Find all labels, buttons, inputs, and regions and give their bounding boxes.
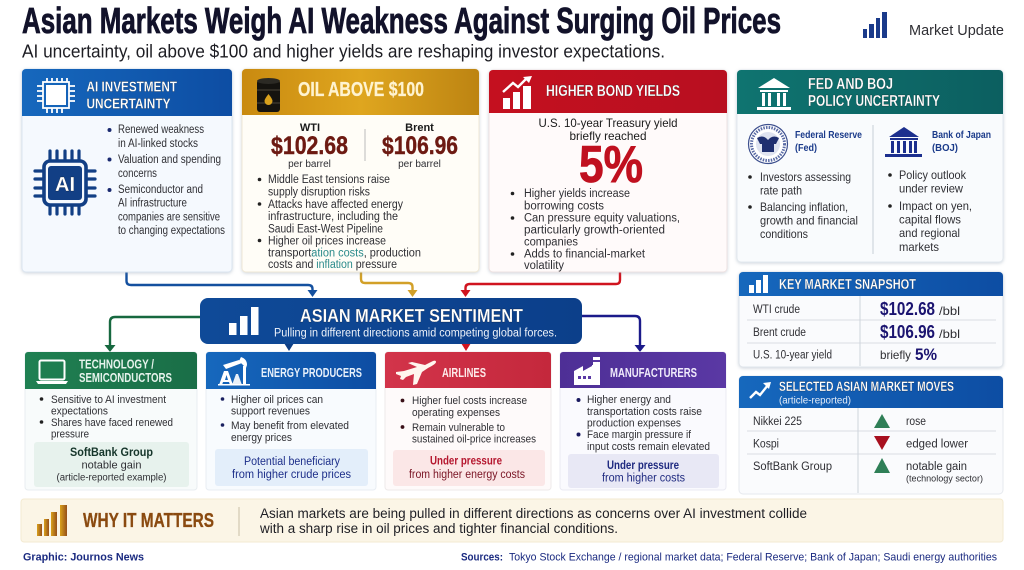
technology bullets: pressure <box>51 428 89 440</box>
energy callout: Potential beneficiary <box>244 456 340 468</box>
manufacturers heading: MANUFACTURERS <box>610 366 697 380</box>
panel: energy producers <box>206 352 376 490</box>
Fed bullets: growth and financial <box>760 214 858 228</box>
treasury yield callout: U.S. 10-year Treasury yield <box>538 116 678 130</box>
panel: Asian market sentiment <box>200 298 582 351</box>
why it matters text: with a sharp rise in oil prices and tighter financial conditions. <box>259 521 618 536</box>
snapshot heading: KEY MARKET SNAPSHOT <box>779 277 916 293</box>
SoftBank callout: notable gain <box>82 460 142 472</box>
AI panel bullets: concerns <box>118 168 157 180</box>
treasury yield callout <box>538 116 678 194</box>
WTI price <box>271 122 348 170</box>
airlines heading: AIRLINES <box>442 366 486 380</box>
energy bullets: support revenues <box>231 406 310 418</box>
SoftBank callout: (article-reported example) <box>56 472 166 484</box>
Fed bullets: rate path <box>760 184 802 198</box>
manufacturers callout <box>568 454 719 488</box>
icon: factory <box>574 357 600 385</box>
AI panel bullets: to changing expectations <box>118 225 225 237</box>
icon: central bank building <box>757 78 791 110</box>
snapshot values: $106.96 <box>880 321 935 342</box>
airlines callout <box>393 450 545 486</box>
icon: trend line <box>750 382 771 398</box>
why it matters text: Asian markets are being pulled in different directions as concerns over AI investment collide <box>260 506 807 521</box>
technology heading: TECHNOLOGY / <box>79 358 154 372</box>
Bank of Japan label <box>932 129 991 154</box>
snapshot values: 5% <box>915 345 937 364</box>
bond panel bullets: Can pressure equity valuations, <box>524 212 680 224</box>
up and down triangles <box>874 414 890 473</box>
WTI price: WTI <box>300 122 320 134</box>
Bank of Japan label: (BOJ) <box>932 142 958 154</box>
icon: snapshot bars <box>749 275 768 293</box>
BOJ bullets: under review <box>899 182 963 196</box>
energy bullets: May benefit from elevated <box>231 420 349 432</box>
panel: why it matters <box>21 499 1003 542</box>
moves heading <box>779 379 954 406</box>
oil panel bullets: Attacks have affected energy <box>268 199 403 211</box>
airlines bullets: Higher fuel costs increase <box>412 395 527 407</box>
icon: market update bars <box>863 12 887 38</box>
footer: sources: Tokyo Stock Exchange / regional market data; Federal Reserve; Bank of Japan; Saudi energy authorities <box>509 552 997 564</box>
manufacturers bullets: input costs remain elevated <box>587 441 710 453</box>
energy callout <box>215 449 368 486</box>
icon: sentiment bars <box>229 307 258 335</box>
airlines callout: from higher energy costs <box>409 469 525 481</box>
manufacturers callout: from higher costs <box>602 472 685 484</box>
AI panel heading: AI INVESTMENT <box>86 78 177 96</box>
sentiment heading: ASIAN MARKET SENTIMENT <box>300 305 524 326</box>
AI panel heading: UNCERTAINTY <box>86 96 170 112</box>
snapshot values: /bbl <box>939 327 960 341</box>
manufacturers bullets: Higher energy and <box>587 394 671 406</box>
bond panel bullets: volatility <box>524 260 564 272</box>
manufacturers bullets <box>576 394 710 453</box>
icon: laptop <box>36 360 68 384</box>
icon: AI chip: AI <box>55 174 75 196</box>
icon: gold bars <box>37 505 67 536</box>
technology bullets: expectations <box>51 406 108 418</box>
AI panel bullets: Valuation and spending <box>118 154 221 166</box>
technology heading: SEMICONDUCTORS <box>79 371 172 385</box>
moves labels: Nikkei 225 <box>753 416 802 428</box>
energy bullets: Higher oil prices can <box>231 394 323 406</box>
oil panel bullets: Saudi East-West Pipeline <box>268 224 383 236</box>
BOJ bullets: markets <box>899 240 939 254</box>
moves labels: SoftBank Group <box>753 461 832 473</box>
oil panel bullets: Higher oil prices increase <box>268 236 386 248</box>
WTI price: per barrel <box>288 159 331 170</box>
moves results: notable gain <box>906 461 967 473</box>
manufacturers bullets: production expenses <box>587 418 681 430</box>
treasury yield callout: briefly reached <box>570 129 646 143</box>
panel: Fed and BOJ policy uncertainty <box>737 70 1003 262</box>
moves labels: Kospi <box>753 438 779 450</box>
Fed bullets <box>748 170 858 241</box>
snapshot labels: Brent crude <box>753 327 806 339</box>
Brent price: per barrel <box>398 159 441 170</box>
icon: Bank of Japan building <box>885 127 922 157</box>
icon: Federal Reserve seal <box>748 124 788 164</box>
AI panel bullets: companies are sensitive <box>118 212 220 224</box>
bond panel bullets: Higher yields increase <box>524 188 630 200</box>
icon: rising bars <box>503 76 532 109</box>
Bank of Japan label: Bank of Japan <box>932 129 991 141</box>
sentiment subtitle: Pulling in different directions amid competing global forces. <box>274 328 557 340</box>
AI panel bullets: Renewed weakness <box>118 124 204 136</box>
oil panel heading: OIL ABOVE $100 <box>298 79 424 101</box>
footer: graphic credit: Graphic: Journos News <box>23 552 144 564</box>
Federal Reserve label: Federal Reserve <box>795 129 862 141</box>
snapshot values <box>880 298 960 364</box>
panel: key market snapshot <box>739 272 1003 367</box>
bond panel bullets: particularly growth-oriented <box>524 224 665 236</box>
AI panel bullets <box>108 124 225 237</box>
moves results: (technology sector) <box>906 474 983 484</box>
energy bullets <box>221 394 349 444</box>
Brent price: $106.96 <box>382 132 458 160</box>
Fed bullets: conditions <box>760 227 808 241</box>
energy bullets: energy prices <box>231 432 292 444</box>
Fed panel heading: POLICY UNCERTAINTY <box>808 93 940 110</box>
SoftBank callout: SoftBank Group <box>70 445 153 459</box>
WTI price: $102.68 <box>271 132 348 160</box>
BOJ bullets: and regional <box>899 226 960 240</box>
oil panel bullets: supply disruption risks <box>268 186 370 198</box>
manufacturers bullets: Face margin pressure if <box>587 429 692 441</box>
Fed panel heading <box>808 76 940 110</box>
panel: selected Asian market moves <box>739 376 1003 494</box>
Federal Reserve label <box>795 129 862 154</box>
market update label: Market Update <box>909 23 1004 39</box>
moves labels <box>753 416 832 473</box>
bond panel bullets <box>511 188 680 272</box>
why it matters heading: WHY IT MATTERS <box>83 510 214 532</box>
icon: oil barrel <box>257 78 280 112</box>
oil panel bullets: transportation costs, production <box>268 248 421 260</box>
panel: oil above $100 <box>242 69 479 272</box>
panel: higher bond yields <box>489 70 727 272</box>
footer: sources: Sources: <box>461 552 503 564</box>
Fed bullets: Investors assessing <box>760 170 851 184</box>
technology bullets <box>40 394 173 440</box>
energy callout: from higher crude prices <box>232 469 351 481</box>
Fed panel heading: FED AND BOJ <box>808 76 893 93</box>
AI panel bullets: Semiconductor and <box>118 184 203 196</box>
BOJ bullets <box>888 168 972 254</box>
Brent price <box>382 122 458 170</box>
airlines bullets: sustained oil-price increases <box>412 434 536 446</box>
snapshot labels <box>753 304 832 362</box>
panel: technology / semiconductors <box>25 352 197 490</box>
bond panel bullets: companies <box>524 236 578 248</box>
oil panel bullets: Middle East tensions raise <box>268 174 390 186</box>
manufacturers bullets: transportation costs raise <box>587 406 702 418</box>
AI panel heading <box>86 78 177 112</box>
Fed bullets: Balancing inflation, <box>760 200 848 214</box>
airlines bullets: Remain vulnerable to <box>412 422 505 434</box>
Brent price: Brent <box>405 122 434 134</box>
icon: AI chip <box>35 151 95 214</box>
connector arrows into sentiment <box>104 272 646 352</box>
panel: AI investment uncertainty <box>22 69 232 272</box>
AI panel bullets: in AI-linked stocks <box>118 138 198 150</box>
airlines callout: Under pressure <box>430 456 502 468</box>
snapshot values: /bbl <box>939 304 960 318</box>
technology bullets: Shares have faced renewed <box>51 417 173 429</box>
moves heading: (article-reported) <box>779 396 851 406</box>
icon: oil pump <box>218 357 250 386</box>
bond panel bullets: Adds to financial-market <box>524 248 646 260</box>
treasury yield callout: 5% <box>579 136 643 194</box>
snapshot labels: WTI crude <box>753 304 800 316</box>
oil panel bullets: infrastructure, including the <box>268 211 398 223</box>
moves results <box>906 416 983 484</box>
technology bullets: Sensitive to AI investment <box>51 394 166 406</box>
panel: manufacturers <box>560 352 726 490</box>
panel: airlines <box>385 352 551 490</box>
moves heading: SELECTED ASIAN MARKET MOVES <box>779 379 954 394</box>
moves results: rose <box>906 416 926 428</box>
manufacturers callout: Under pressure <box>607 460 679 472</box>
snapshot labels: U.S. 10-year yield <box>753 350 832 362</box>
moves results: edged lower <box>906 438 968 450</box>
BOJ bullets: capital flows <box>899 212 961 226</box>
subtitle: AI uncertainty, oil above $100 and higher yields are reshaping investor expectations. <box>22 40 665 62</box>
icon: airplane <box>396 361 436 385</box>
BOJ bullets: Policy outlook <box>899 168 967 182</box>
AI panel bullets: AI infrastructure <box>118 198 187 210</box>
icon: chip header <box>37 78 75 113</box>
technology heading <box>79 358 172 385</box>
snapshot values: $102.68 <box>880 298 935 319</box>
SoftBank callout <box>34 442 189 487</box>
airlines bullets: operating expenses <box>412 407 500 419</box>
bond panel heading: HIGHER BOND YIELDS <box>546 83 680 100</box>
BOJ bullets: Impact on yen, <box>899 199 972 213</box>
snapshot values: briefly <box>880 348 911 362</box>
oil panel bullets <box>258 174 421 271</box>
oil panel bullets: costs and inflation pressure <box>268 259 397 271</box>
Federal Reserve label: (Fed) <box>795 142 817 154</box>
why it matters text <box>259 506 807 536</box>
bond panel bullets: borrowing costs <box>524 200 604 212</box>
airlines bullets <box>401 395 536 446</box>
energy heading: ENERGY PRODUCERS <box>261 366 362 380</box>
